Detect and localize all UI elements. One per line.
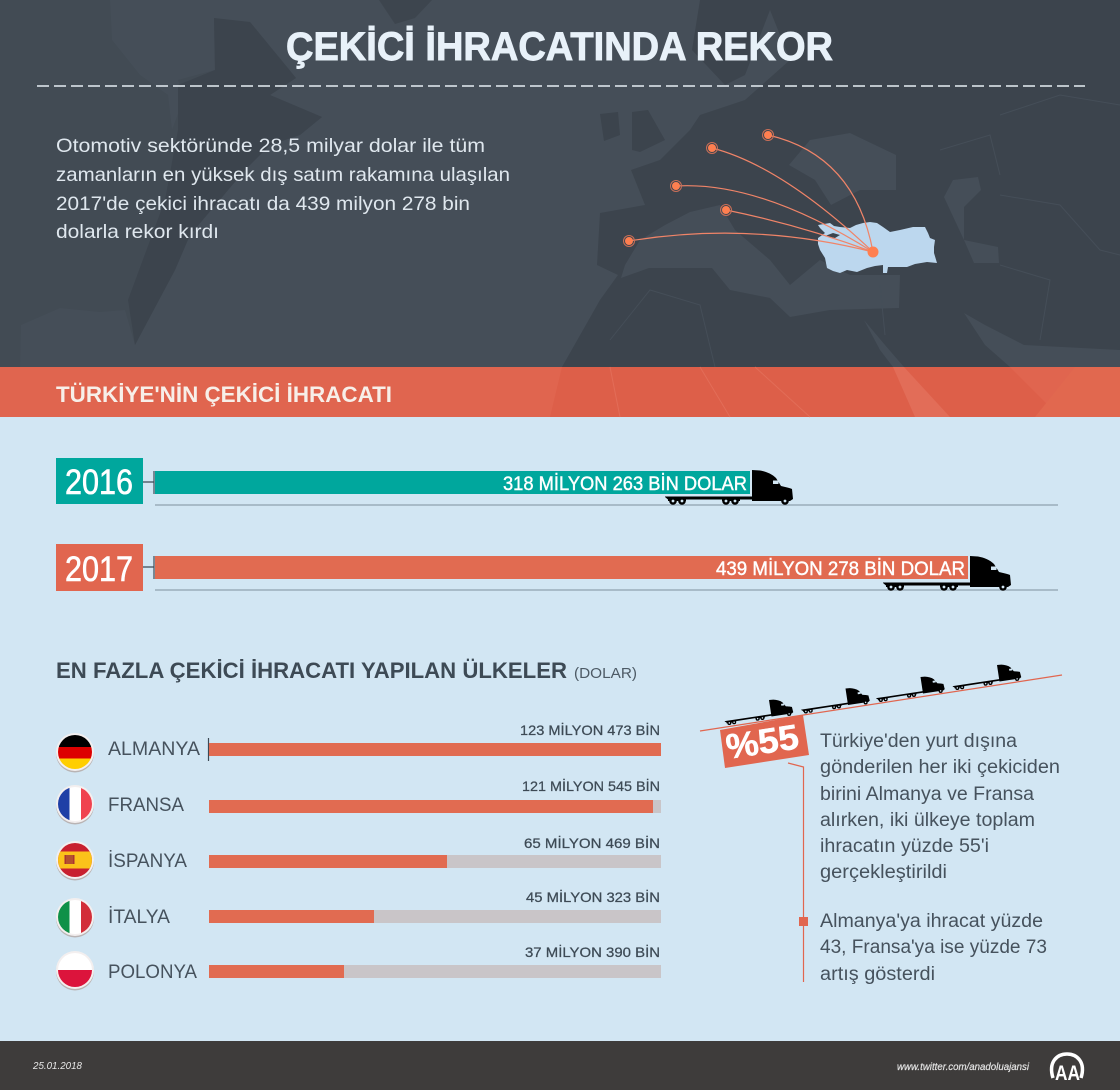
row: Fransa — [56, 777, 661, 824]
route lines — [629, 135, 873, 252]
row: Almanya: ALMANYA — [108, 739, 200, 760]
row: İspanya: 65 MİLYON 469 BİN — [524, 834, 660, 851]
countries heading: EN FAZLA ÇEKİCİ İHRACATI YAPILAN ÜLKELER — [56, 658, 567, 683]
connector line — [788, 763, 808, 982]
section band — [0, 367, 1120, 417]
year box 2016 — [56, 458, 143, 504]
side note 1: gönderilen her iki çekiciden — [820, 757, 1060, 778]
AA logo — [1052, 1054, 1082, 1085]
row: İtalya: 45 MİLYON 323 BİN — [526, 888, 660, 905]
route markers — [624, 130, 878, 258]
row: Almanya — [56, 721, 661, 772]
rising trucks on slope — [700, 662, 1062, 731]
bar 2017 — [155, 556, 968, 579]
countries heading: (DOLAR) — [574, 665, 637, 682]
header map background — [0, 0, 1120, 367]
2016 row — [56, 458, 1058, 505]
map: Turkey with export routes — [624, 130, 937, 273]
intro text: dolarla rekor kırdı — [56, 221, 219, 243]
row: Polonya: 37 MİLYON 390 BİN — [525, 943, 660, 960]
footer — [0, 1041, 1120, 1090]
percentage badge: %55 — [723, 717, 801, 767]
side note 1: alırken, iki ülkeye toplam — [820, 810, 1035, 831]
band heading: TÜRKİYE'NİN ÇEKİCİ İHRACATI — [56, 382, 392, 407]
row: İspanya: İSPANYA — [108, 851, 187, 872]
2017 row: 2017 — [65, 550, 133, 589]
side note 1: birini Almanya ve Fransa — [820, 784, 1034, 805]
bar 2016 — [155, 471, 750, 494]
2017 row: 439 MİLYON 278 BİN DOLAR — [716, 559, 965, 580]
2016 row: 2016 — [65, 463, 133, 502]
row: Almanya: 123 MİLYON 473 BİN — [520, 721, 660, 738]
row: Polonya: POLONYA — [108, 962, 197, 983]
intro text: 2017'de çekici ihracatı da 439 milyon 278 bin — [56, 193, 470, 215]
truck icon — [665, 470, 793, 505]
truck icon — [883, 556, 1011, 591]
side note 2: artış gösterdi — [820, 964, 935, 985]
row: Fransa: FRANSA — [108, 795, 184, 816]
row: İtalya — [56, 888, 661, 938]
side note 2: 43, Fransa'ya ise yüzde 73 — [820, 937, 1047, 958]
side note 1: ihracatın yüzde 55'i — [820, 836, 989, 857]
row: İtalya: İTALYA — [108, 907, 170, 928]
date: 25.01.2018 — [32, 1061, 82, 1072]
row: Polonya — [56, 943, 661, 990]
AA logo: AA — [1055, 1062, 1080, 1085]
row: Fransa: 121 MİLYON 545 BİN — [522, 777, 660, 794]
title: ÇEKİCİ İHRACATINDA REKOR — [286, 25, 833, 69]
intro text: zamanların en yüksek dış satım rakamına ulaşılan — [56, 164, 510, 186]
year box 2017 — [56, 544, 143, 591]
side note 2 — [820, 911, 1047, 985]
website: www.twitter.com/anadoluajansi — [897, 1061, 1030, 1073]
2017 row — [56, 544, 1058, 591]
row: İspanya — [56, 834, 661, 880]
side note 1: Türkiye'den yurt dışına — [820, 731, 1017, 752]
2016 row: 318 MİLYON 263 BİN DOLAR — [503, 474, 747, 495]
side note 2: Almanya'ya ihracat yüzde — [820, 911, 1043, 932]
dashed divider — [37, 85, 1085, 87]
intro text — [56, 135, 510, 243]
country chart — [56, 721, 661, 990]
side note 1 — [820, 731, 1060, 883]
side note 1: gerçekleştirildi — [820, 862, 947, 883]
Marmara sea — [825, 233, 840, 238]
intro text: Otomotiv sektöründe 28,5 milyar dolar ile tüm — [56, 135, 485, 157]
Turkey shape — [818, 222, 937, 273]
